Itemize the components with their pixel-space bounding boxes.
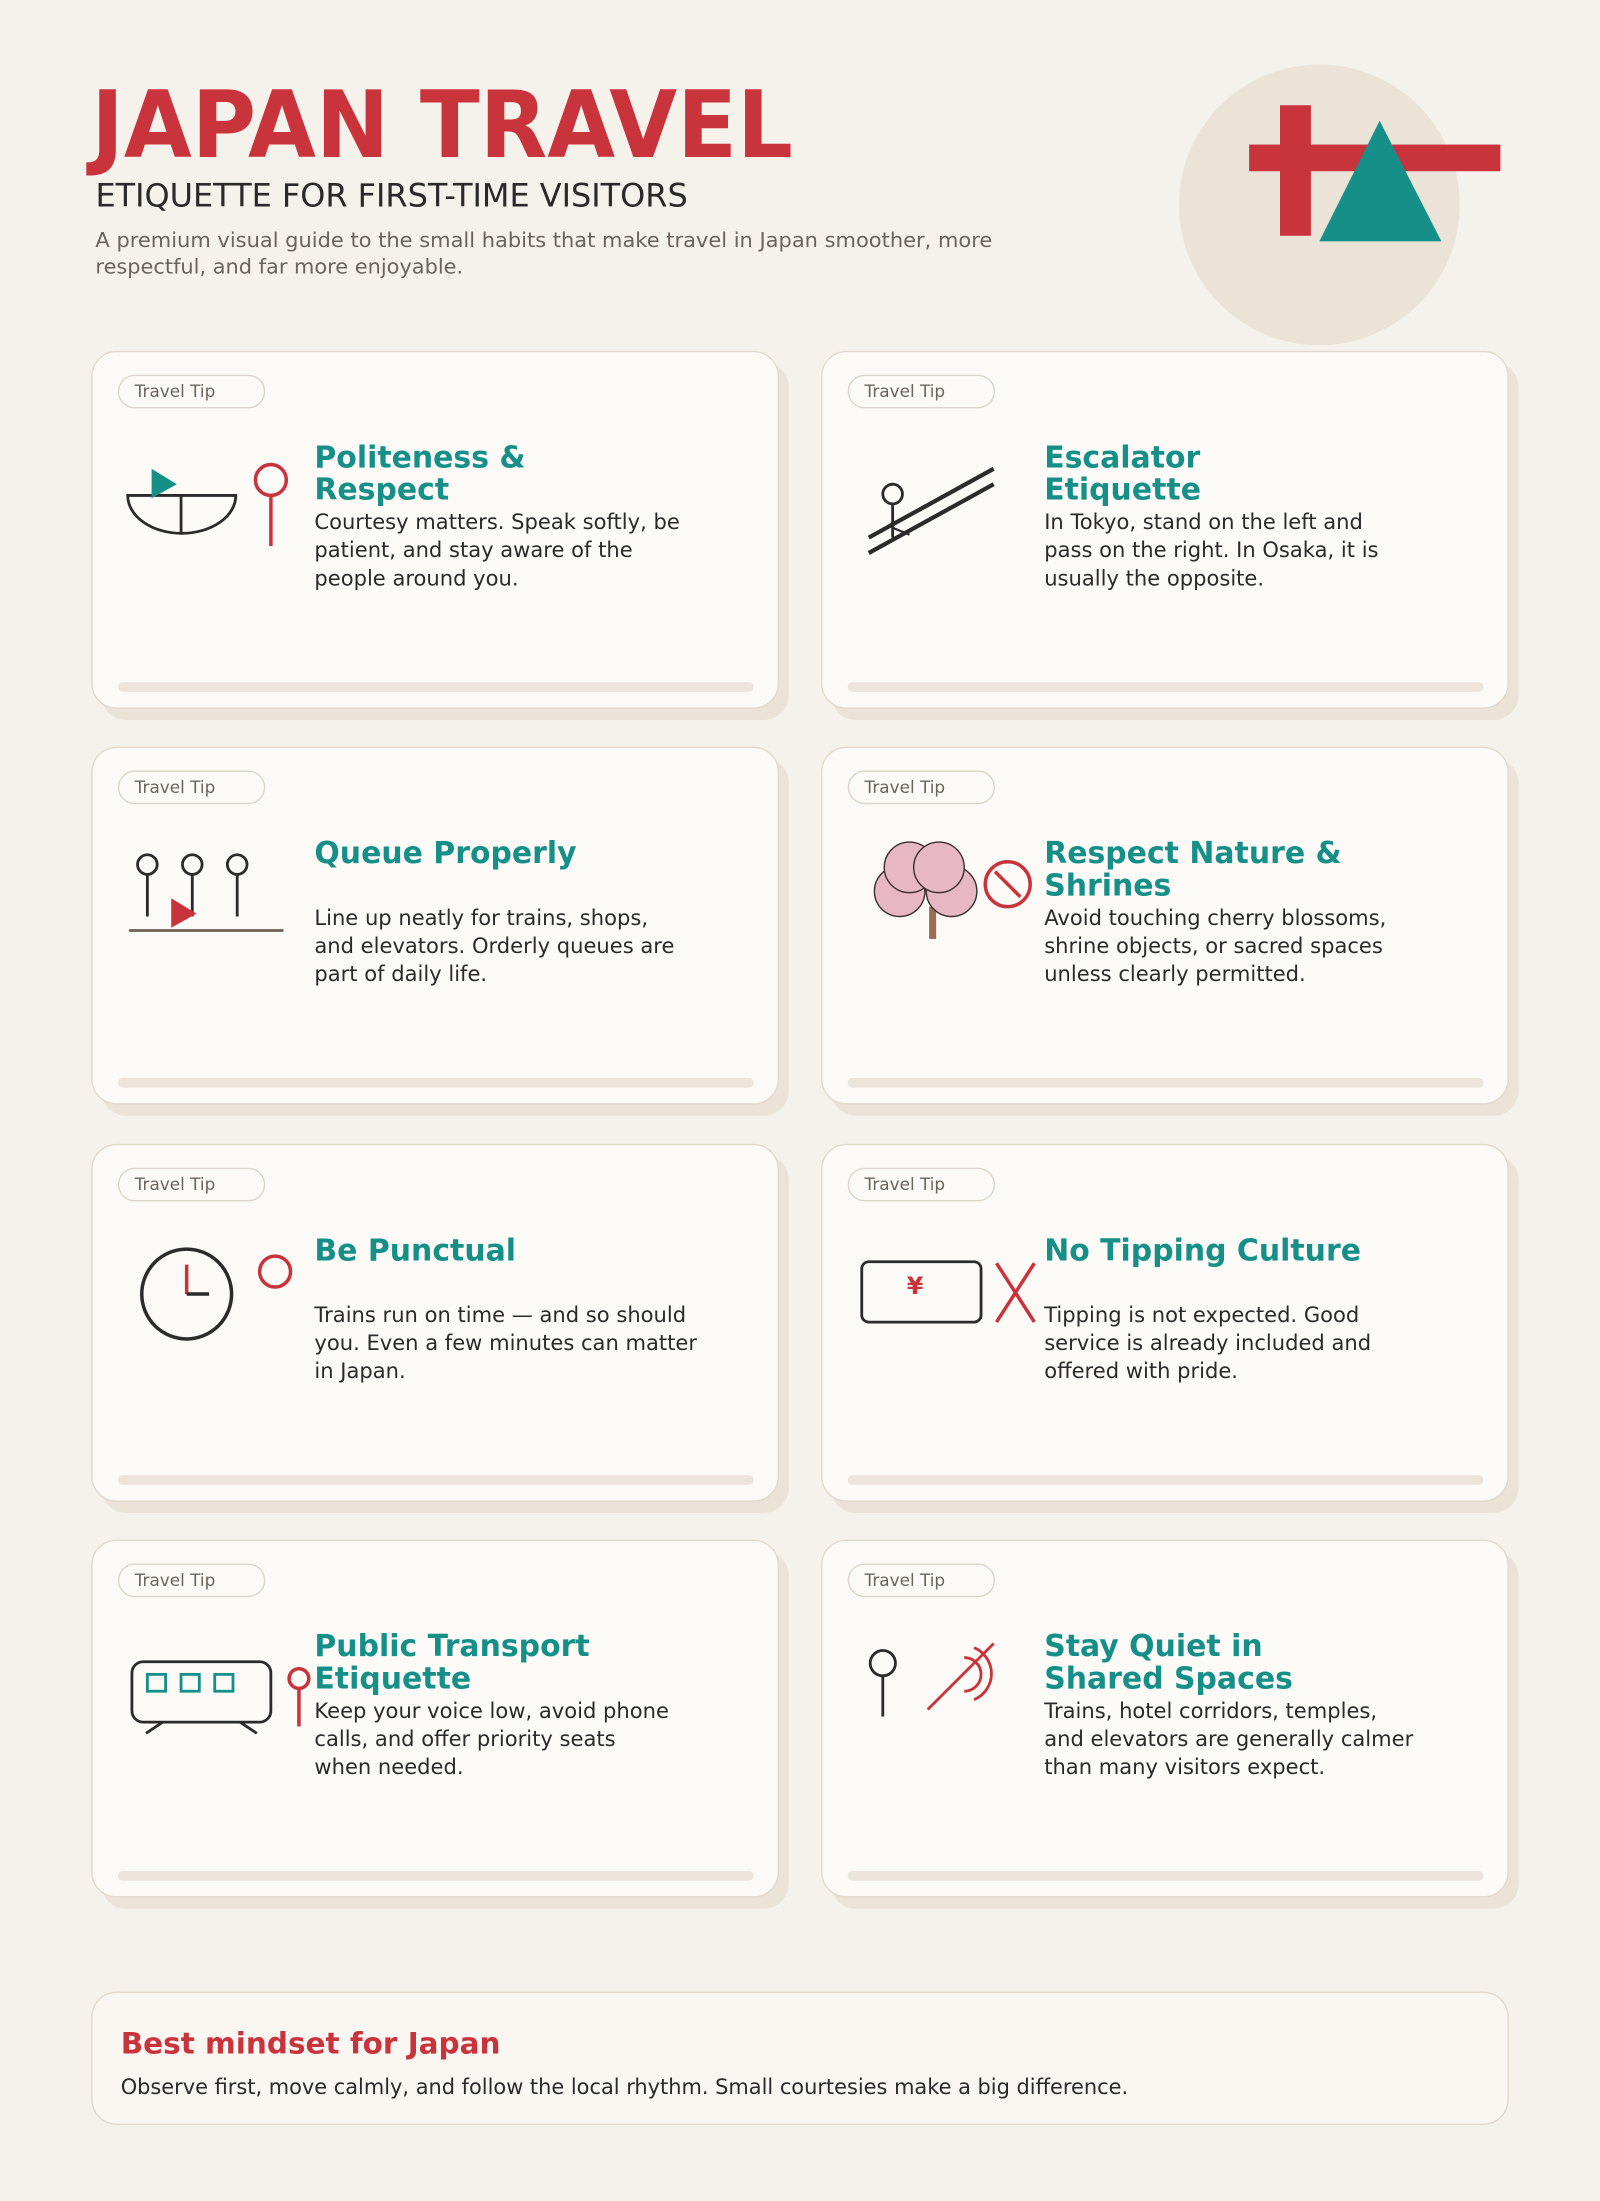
panel: politeness & respect: Courtesy matters. Speak softly, be: [314, 509, 680, 535]
title: A premium visual guide to the small habits that make travel in Japan smoother, more: [95, 228, 992, 252]
panel: be punctual: in Japan.: [314, 1359, 406, 1384]
panel: respect nature & shrines: unless clearly permitted.: [1044, 961, 1306, 987]
panel: stay quiet in shared spaces: and elevators are generally calmer: [1044, 1726, 1413, 1752]
panel: no tipping culture: No Tipping Culture: [1044, 1234, 1361, 1269]
panel: be punctual: you. Even a few minutes can matter: [314, 1331, 697, 1356]
icon: yen bill with X: ¥: [907, 1272, 924, 1300]
panel: politeness & respect: patient, and stay aware of the: [314, 538, 633, 563]
footer heading: Best mindset for Japan: [121, 2027, 501, 2060]
panel: stay quiet in shared spaces: [821, 1540, 1509, 1898]
panel: politeness & respect: Respect: [314, 473, 449, 508]
panel: respect nature & shrines: Respect Nature &: [1044, 836, 1342, 872]
icon: bowl and pin: [126, 462, 288, 546]
panel: respect nature & shrines: Shrines: [1044, 869, 1171, 904]
panel: escalator etiquette: In Tokyo, stand on the left and: [1044, 509, 1363, 535]
panel: escalator etiquette: usually the opposite.: [1044, 566, 1264, 591]
panel: public transport etiquette: [91, 1540, 779, 1898]
panel: no tipping culture: Tipping is not expected. Good: [1044, 1302, 1359, 1328]
panel: no tipping culture: [821, 1144, 1509, 1502]
icon: queue: [129, 853, 284, 932]
icon: escalator: [868, 466, 995, 555]
title: ETIQUETTE FOR FIRST-TIME VISITORS: [95, 176, 688, 214]
panel: stay quiet in shared spaces: Stay Quiet in: [1044, 1629, 1263, 1665]
panel: politeness & respect: Travel Tip: [135, 382, 215, 401]
panel: no tipping culture: service is already included and: [1044, 1331, 1371, 1356]
panel: respect nature & shrines: shrine objects, or sacred spaces: [1044, 933, 1383, 959]
panel: be punctual: Trains run on time — and so should: [314, 1302, 686, 1328]
panel: queue properly: and elevators. Orderly queues are: [314, 933, 674, 959]
icon: train: [130, 1660, 310, 1734]
panel: stay quiet in shared spaces: than many visitors expect.: [1044, 1754, 1325, 1780]
title: JAPAN TRAVEL: [86, 71, 793, 179]
panel: stay quiet in shared spaces: Travel Tip: [865, 1571, 945, 1590]
panel: no tipping culture: Travel Tip: [865, 1175, 945, 1194]
icon: person with muted sound: [868, 1642, 995, 1716]
panel: queue properly: Queue Properly: [314, 836, 577, 872]
panel: queue properly: Travel Tip: [135, 778, 215, 797]
panel: stay quiet in shared spaces: Trains, hotel corridors, temples,: [1044, 1698, 1377, 1724]
panel: be punctual: Travel Tip: [135, 1175, 215, 1194]
panel: escalator etiquette: Etiquette: [1044, 473, 1201, 508]
header decoration: circle with cross and triangle: [1179, 64, 1500, 346]
panel: public transport etiquette: Travel Tip: [135, 1571, 215, 1590]
panel: public transport etiquette: Keep your voice low, avoid phone: [314, 1698, 669, 1724]
title: [86, 71, 992, 279]
panel: public transport etiquette: Etiquette: [314, 1662, 471, 1697]
panel: escalator etiquette: Escalator: [1044, 441, 1200, 476]
panel: public transport etiquette: when needed.: [314, 1754, 464, 1780]
panel: respect nature & shrines: Travel Tip: [865, 778, 945, 797]
panel: politeness & respect: people around you.: [314, 566, 519, 591]
footer text: Observe first, move calmly, and follow the local rhythm. Small courtesies make a big difference.: [121, 2074, 1128, 2100]
panel: respect nature & shrines: [821, 747, 1509, 1105]
panel: be punctual: Be Punctual: [314, 1234, 516, 1269]
panel: respect nature & shrines: Avoid touching cherry blossoms,: [1044, 905, 1386, 931]
panel: queue properly: [91, 747, 779, 1105]
panel: no tipping culture: offered with pride.: [1044, 1359, 1238, 1384]
title: respectful, and far more enjoyable.: [95, 255, 463, 279]
icon: cherry tree and no sign: [874, 841, 1032, 939]
panel: public transport etiquette: Public Transport: [314, 1629, 590, 1665]
panel: queue properly: part of daily life.: [314, 961, 487, 987]
icon: yen bill with X: [860, 1260, 1036, 1324]
panel: stay quiet in shared spaces: Shared Spaces: [1044, 1662, 1293, 1697]
panel: public transport etiquette: calls, and offer priority seats: [314, 1726, 616, 1752]
panel: queue properly: Line up neatly for trains, shops,: [314, 905, 648, 931]
icon: clock: [140, 1247, 292, 1341]
panel: escalator etiquette: Travel Tip: [865, 382, 945, 401]
panel: politeness & respect: Politeness &: [314, 441, 526, 476]
panel: escalator etiquette: [821, 351, 1509, 709]
panel: politeness & respect: [91, 351, 779, 709]
panel: escalator etiquette: pass on the right. In Osaka, it is: [1044, 538, 1379, 563]
panel: be punctual: [91, 1144, 779, 1502]
footer callout: best mindset: [91, 1992, 1509, 2125]
